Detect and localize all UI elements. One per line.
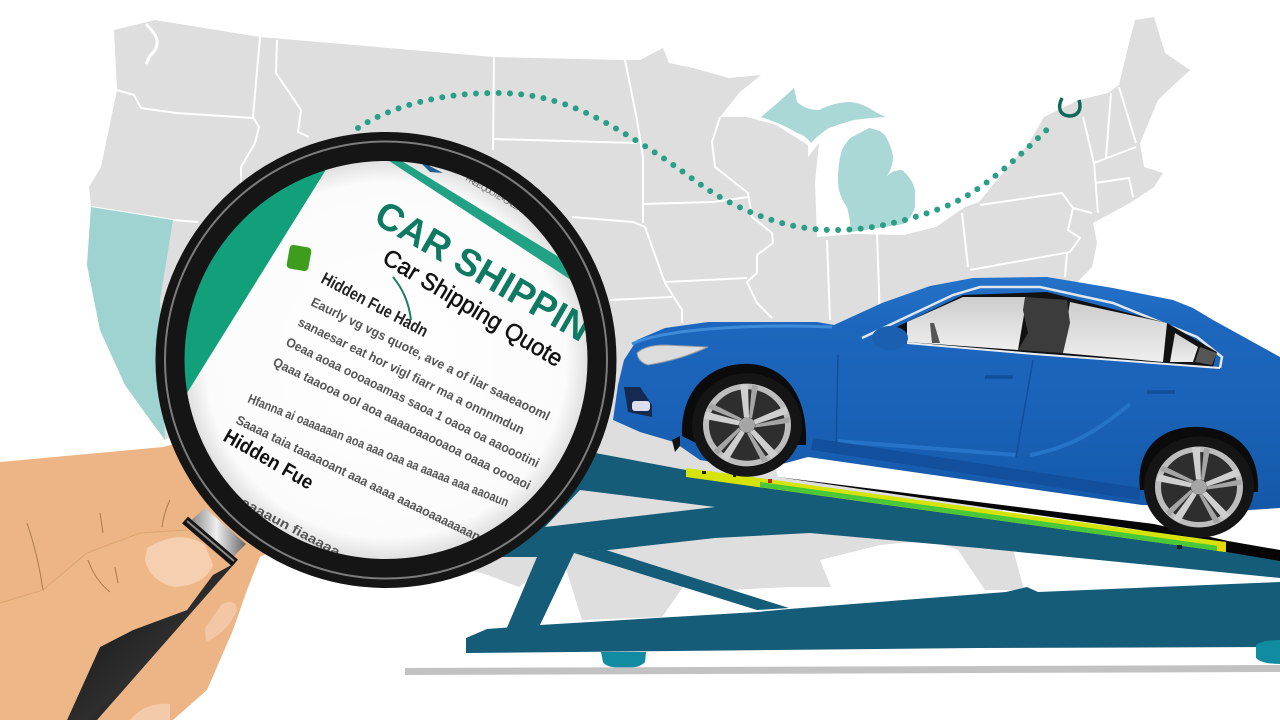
thumb nail [145, 537, 213, 587]
rear wheel arch [1139, 427, 1258, 492]
body text lines [234, 294, 553, 560]
rear quarter window [1170, 333, 1198, 362]
lens glass [181, 158, 591, 562]
finger nail [205, 602, 237, 642]
body text lines: Hfanna ai oaaaaaan aoa aaa oaa aa aaaaa aaa aaoaun [246, 391, 511, 510]
white gap under car [770, 445, 1280, 552]
magnifying glass [160, 142, 622, 578]
window sill chrome [907, 343, 1220, 368]
hand holding magnifier [0, 440, 290, 720]
door seams and handles [836, 355, 1033, 457]
car body [613, 277, 1280, 510]
knuckle creases [27, 500, 170, 592]
magnifier handle [67, 563, 235, 720]
body text lines: Eaurly vg vgs quote, ave a of ilar saaeaooml [309, 294, 553, 423]
lower body shine [838, 404, 1130, 455]
lower body shadow [812, 444, 1140, 494]
thumb [0, 530, 213, 720]
lens rim [170, 146, 602, 574]
label: hidden fee upper: Hidden Fue Hadn [318, 269, 431, 341]
body text lines: Oeaa aoaa oooaoamas saoa 1 oaoa oa aaoootini [284, 334, 542, 470]
mud flap [672, 436, 680, 452]
ramp wheel left [601, 652, 646, 668]
headlight [637, 345, 708, 365]
heading: CAR SHIPPING: CAR SHIPPING [368, 193, 622, 365]
side mirror [872, 326, 908, 350]
lower finger nail [130, 704, 170, 720]
black beam [778, 477, 1280, 561]
body text lines: aaaaun fiaaaaa [239, 494, 344, 560]
label: hidden fee lower: Hidden Fue [220, 425, 317, 494]
lower michigan teal [838, 128, 915, 232]
metal neck [187, 508, 246, 562]
route end marker [1060, 98, 1080, 116]
ramp wheel right [1256, 640, 1280, 664]
palm and fingers [0, 440, 290, 720]
state borders [91, 37, 1136, 323]
yellow green strip [686, 468, 1226, 552]
magnified quote document [184, 161, 587, 554]
california teal state [87, 207, 173, 440]
front seat [1018, 297, 1070, 353]
top beam and strut [500, 452, 1280, 630]
blue sedan [613, 277, 1280, 538]
green sidebar [184, 170, 326, 393]
base platform [466, 582, 1280, 653]
thumb top edge [0, 530, 187, 603]
collar [185, 520, 235, 563]
green header stripe [389, 161, 570, 280]
small header text: FREE QUOTE • CALL NOW [464, 174, 535, 220]
fog light [624, 387, 652, 417]
green pen mark [393, 277, 411, 320]
body text lines: sanaesar eat hor vigl fiarr ma a onnnmdun [296, 314, 527, 437]
front window [907, 297, 1027, 350]
dotted shipping route [358, 93, 1054, 230]
puget sound [146, 24, 157, 64]
green app icon [286, 244, 312, 272]
window frame [880, 292, 1217, 367]
rear wheel [1144, 436, 1254, 538]
collar shine [187, 521, 234, 561]
hood highlight [632, 326, 832, 344]
blue corner fragment [422, 164, 443, 173]
window stalk [930, 323, 940, 343]
front wheel arch [682, 364, 806, 445]
subheading: Car Shipping Quote: Car Shipping Quote [378, 244, 568, 373]
rear window [1062, 302, 1167, 362]
rear quarter wedge [1195, 347, 1217, 365]
map landmass [87, 17, 1190, 620]
rim highlight [165, 142, 607, 578]
fog light lens [632, 401, 650, 411]
car ramp [466, 445, 1280, 668]
diagonal brace [574, 550, 789, 610]
upper michigan teal [761, 88, 885, 143]
front wheel [692, 373, 802, 477]
map of the United States [87, 17, 1190, 620]
body text lines: Qaaa taaooa ool aoa aaaaoaaooaoa oaaa oooaoi [271, 354, 533, 493]
window chrome [862, 287, 1222, 368]
body text lines: Saaaa taia taaaaoant aaa aaaa aaaaoaaaaaaan [234, 412, 483, 544]
floor line [405, 665, 1280, 675]
